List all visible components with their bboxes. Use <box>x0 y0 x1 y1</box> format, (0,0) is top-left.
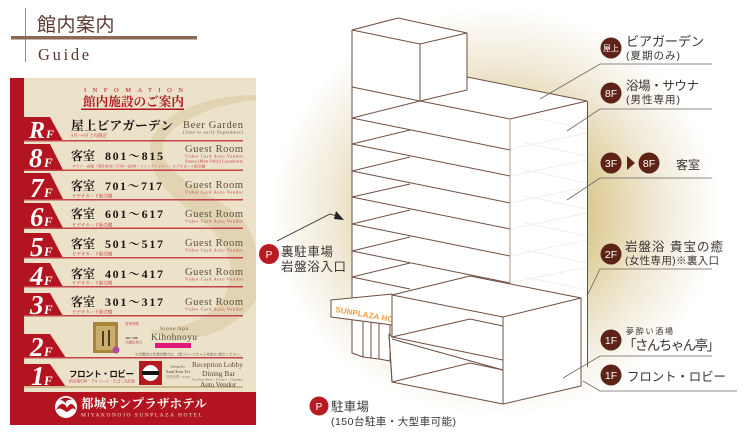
icon: 2F badge: 2F <box>605 249 617 261</box>
floor row: 5F <box>24 232 244 262</box>
floor row: 8F <box>24 143 244 173</box>
floor row: 3F: 客室 <box>71 294 95 309</box>
floor row: 8F: Sauna (Men Only) Laundrette <box>185 158 243 164</box>
floor row: 2F <box>24 321 243 362</box>
floor row: 5F: Guest Room <box>185 238 243 249</box>
floor row: 3F: Video Card Auto Vendor <box>185 306 244 312</box>
floor row: 1F: Dining Bar <box>170 364 186 368</box>
icon: rooftop badge <box>600 38 622 58</box>
icon: 8F badge <box>600 82 622 104</box>
floor row: 1F: 営業時間〜23:00 <box>166 374 190 379</box>
callout: front lobby: フロント・ロビー <box>627 370 726 384</box>
floor row: 7F: Video Card Auto Vendor <box>185 190 244 194</box>
floor row: 5F: F <box>43 244 53 259</box>
panel title <box>81 87 184 110</box>
tower outline and floors <box>352 30 588 367</box>
floor row: 7F: ビデオカード販売機 <box>72 192 113 200</box>
floor row: 2F: F <box>43 344 53 359</box>
floor row: 4F: 客室 <box>71 266 95 281</box>
callout: bath and sauna: (男性専用) <box>626 93 680 106</box>
callout: rooftop beer garden: ビアガーデン <box>626 34 704 49</box>
right wall faint floor lines <box>510 116 587 290</box>
icon: 1F badge: 1F <box>605 370 617 382</box>
background glow behind building <box>270 7 720 417</box>
icon: parking badge: P <box>316 402 323 413</box>
icon: parking badge: P <box>266 250 273 261</box>
floor row: 1F: Reception Lobby <box>192 360 243 369</box>
floor row: RF: F <box>45 127 54 141</box>
icon: dining bar logo <box>139 361 162 385</box>
floor row: 1F: F <box>43 373 53 388</box>
entrance columns <box>352 318 390 361</box>
floor row: 5F: Video Card Auto Vendor <box>185 248 244 252</box>
callout: guest rooms: 客室 <box>676 158 700 172</box>
floor row: 1F: フロント・ロビー <box>69 369 134 379</box>
floor row: 3F <box>24 290 244 320</box>
floor row: 2F: 10:00〜22:00 <box>125 336 138 340</box>
floor row: 2F: 月曜定休日 <box>125 340 142 344</box>
panel title: 館内施設のご案内 <box>83 94 184 109</box>
heading: guide <box>11 8 197 64</box>
floor row: 6F <box>24 202 244 232</box>
callout: rear parking with arrow: 裏駐車場 <box>281 244 333 259</box>
panel title: INFOMATION <box>84 87 183 94</box>
floor row: 2F: ※岩盤浴の営業時間内は、1階ロビーのちゃん特典を2割引ください。 <box>135 352 243 356</box>
callout: front lobby <box>583 364 737 391</box>
floor row: 8F: Video Card Auto Vendor <box>185 154 244 158</box>
callout: bath and sauna: 浴場・サウナ <box>626 79 699 93</box>
callout: izakaya <box>563 326 720 378</box>
floor row: 4F: F <box>43 273 53 288</box>
floor row: 7F <box>24 173 244 203</box>
floor row: 1F: 1 <box>31 361 44 391</box>
floor row: 7F: 客室 <box>71 178 95 193</box>
footer: hotel logo and name: MIYAKONOJO SUNPLAZA HOTEL <box>81 412 203 418</box>
icon: 1F badge: 1F <box>605 335 617 347</box>
arrow <box>277 211 344 241</box>
floor row: 1F: Auto Vendor <box>200 380 236 389</box>
floor row: 3F: 301～317 <box>105 295 163 309</box>
building illustration <box>331 18 588 404</box>
floor row: RF: 屋上ビアガーデン <box>71 118 173 133</box>
floor row: 6F: F <box>43 214 53 229</box>
callout: stone spa: 岩盤浴 貴宝の癒 <box>625 239 723 254</box>
floor row: 8F: サウナ・浴場（男性専用）17:00～24:00・コインランドリー・ビデオカード販売機 <box>72 164 205 168</box>
icon: parking badge <box>310 396 328 416</box>
floor row: 2F: 営業時間 <box>125 321 139 326</box>
entrance canopy with sign <box>331 294 394 325</box>
floor row: 3F: Guest Room <box>185 297 243 308</box>
icon: 1F badge <box>600 364 622 386</box>
floor row: 4F: Video Card Auto Vendor <box>185 276 244 282</box>
floor row: 2F: Kihohnoyu <box>151 333 197 343</box>
floor row: 7F: Guest Room <box>185 180 243 191</box>
callout: rear parking with arrow: 岩盤浴入口 <box>281 259 346 274</box>
floor row: RF: R <box>28 118 45 144</box>
floor row: 2F: Stone Spa <box>160 326 189 332</box>
callout: izakaya: 「さんちゃん亭」 <box>623 337 720 353</box>
floor row: 8F: F <box>43 155 53 170</box>
floor row: RF: Beer Garden <box>183 120 244 131</box>
floor row: RF: (June to early September) <box>183 130 244 134</box>
annex building <box>389 276 581 404</box>
callout: stone spa <box>587 239 723 296</box>
floor row: 3F: ビデオカード販売機 <box>72 308 113 316</box>
tower silhouette <box>352 18 587 367</box>
floor row: 1F: Dining Bar <box>202 369 236 378</box>
floor row: 6F: Video Card Auto Vendor <box>185 218 244 224</box>
floor row: 5F: 5 <box>30 232 44 262</box>
callout: main parking: 駐車場 <box>331 399 369 414</box>
floor row: 1F: SanChan Tei <box>166 369 191 374</box>
floor row: 6F: 601～617 <box>105 207 163 221</box>
floor row: 4F: 4 <box>29 261 44 291</box>
icon: hotel emblem <box>55 396 77 418</box>
icon: 1F badge <box>600 330 622 350</box>
callout: main parking <box>310 396 456 428</box>
icon: 3F badge <box>600 152 622 174</box>
entrance canopy with sign: SUNPLAZA HO <box>335 305 394 324</box>
floor row: 6F: 客室 <box>71 206 95 221</box>
floor row: 4F: 401～417 <box>105 267 163 281</box>
floor row: 8F: 客室 <box>71 148 95 163</box>
icon: 8F badge: 8F <box>643 158 655 170</box>
floor row: 5F: 501～517 <box>105 237 163 251</box>
floor row: 8F: 801～815 <box>105 149 163 163</box>
footer: hotel logo and name: 都城サンプラザホテル <box>81 396 207 411</box>
footer: hotel logo and name <box>55 396 207 418</box>
floor row: 4F: ビデオカード販売機 <box>72 280 113 286</box>
floor row: 8F: Guest Room <box>185 144 243 155</box>
callout: stone spa: (女性専用)※裏入口 <box>625 254 719 267</box>
callout: bath and sauna <box>567 79 712 131</box>
floor row: 7F: 7 <box>30 173 45 203</box>
floor row: RF: 5月〜9月上旬限定 <box>71 132 107 139</box>
panel: floor directory <box>10 78 256 425</box>
callout: rooftop beer garden <box>540 34 712 99</box>
icon: 3F badge: 3F <box>605 158 617 170</box>
floor row: 5F: 客室 <box>71 236 95 251</box>
floor row: 1F: 宿泊案内所・アルコール・たばこ売店他 <box>69 378 135 384</box>
penthouse <box>352 18 467 101</box>
icon: 8F badge <box>638 152 660 174</box>
floor row: 3F: 3 <box>29 290 44 320</box>
floor row: 1F: Tax-Free Shop · Alcohol · Cigarette <box>192 378 244 382</box>
floor row: 6F: ビデオカード販売機 <box>72 222 113 228</box>
floor row: 4F: Guest Room <box>185 267 243 278</box>
callout: guest rooms <box>567 152 712 200</box>
heading: guide: Guide <box>38 45 92 64</box>
icon: stone spa sign <box>93 322 120 354</box>
floor row: 1F <box>24 360 244 391</box>
callout: main parking: (150台駐車・大型車可能) <box>331 415 456 428</box>
floor row: 5F: ビデオカード販売機 <box>72 250 113 258</box>
floor row: 2F: 2 <box>29 332 44 362</box>
icon: 8F badge: 8F <box>605 88 617 100</box>
floor row: 8F: 8 <box>29 143 43 173</box>
floor row: 6F: Guest Room <box>185 209 243 220</box>
floor row: 7F: F <box>43 185 53 200</box>
callout: rooftop beer garden: (夏期のみ) <box>626 50 680 62</box>
icon: rooftop badge: 屋上 <box>603 44 619 53</box>
floor row: 7F: 701～717 <box>105 179 162 193</box>
floor row: 3F: F <box>43 302 53 317</box>
floor row: 4F <box>24 261 244 291</box>
callout: rear parking with arrow <box>259 211 346 274</box>
heading: guide: 館内案内 <box>37 14 115 36</box>
callout: izakaya: 夢酔い酒場 <box>626 326 673 336</box>
floor row: 6F: 6 <box>30 202 44 232</box>
floor row: RF <box>24 117 244 144</box>
